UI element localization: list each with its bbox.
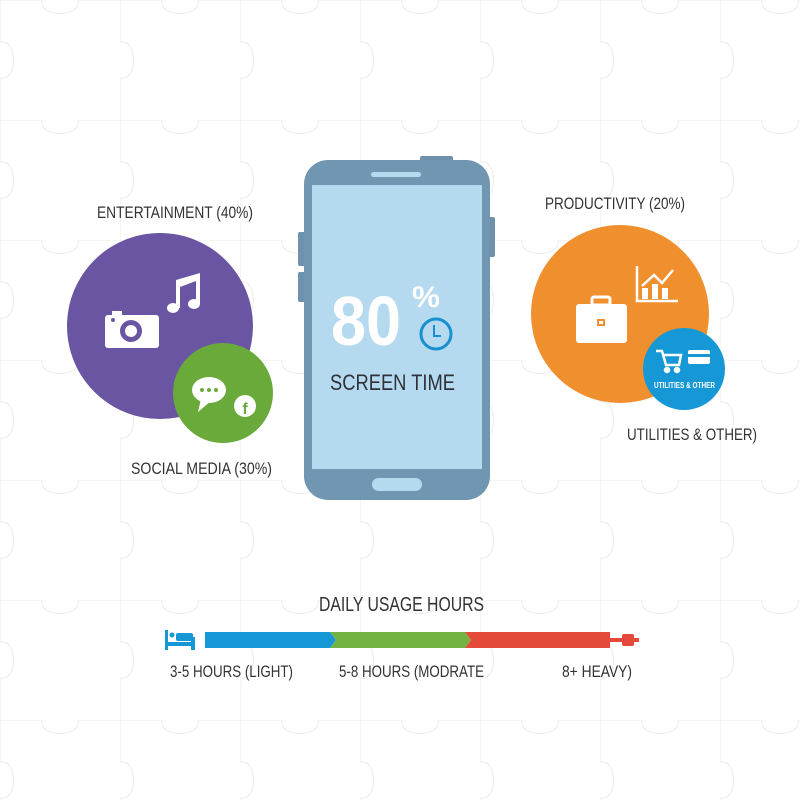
circle: productivity	[531, 225, 709, 403]
icon: chat bubble	[192, 377, 226, 412]
label: utilities: UTILITIES & OTHER)	[627, 425, 757, 444]
label: light: 3-5 HOURS (LIGHT)	[170, 662, 293, 681]
icon: cart	[656, 351, 681, 372]
circle: utilities: UTILITIES & OTHER	[654, 381, 715, 390]
icon: facebook: f	[242, 401, 248, 418]
title: entertainment: ENTERTAINMENT (40%)	[97, 203, 253, 222]
icon: bed	[165, 630, 195, 650]
label: heavy: 8+ HEAVY)	[562, 662, 632, 681]
label: moderate: 5-8 HOURS (MODRATE	[339, 662, 484, 681]
label: social media: SOCIAL MEDIA (30%)	[131, 459, 272, 478]
stat: 80%: %	[412, 281, 440, 314]
icon: camera	[105, 311, 159, 348]
title: daily usage hours: DAILY USAGE HOURS	[319, 594, 484, 616]
circle: entertainment	[67, 233, 253, 419]
label: screen time: SCREEN TIME	[330, 370, 455, 395]
icon: music note	[167, 273, 200, 313]
stat: 80%: 80	[331, 282, 401, 360]
circle: utilities	[643, 328, 725, 410]
title: productivity: PRODUCTIVITY (20%)	[545, 194, 685, 213]
icon: clock	[421, 319, 451, 349]
circle: social media	[173, 343, 273, 443]
icon: chart	[637, 266, 678, 301]
icon: briefcase	[576, 297, 627, 343]
icon: card	[688, 350, 710, 364]
icon: plug	[610, 634, 639, 646]
